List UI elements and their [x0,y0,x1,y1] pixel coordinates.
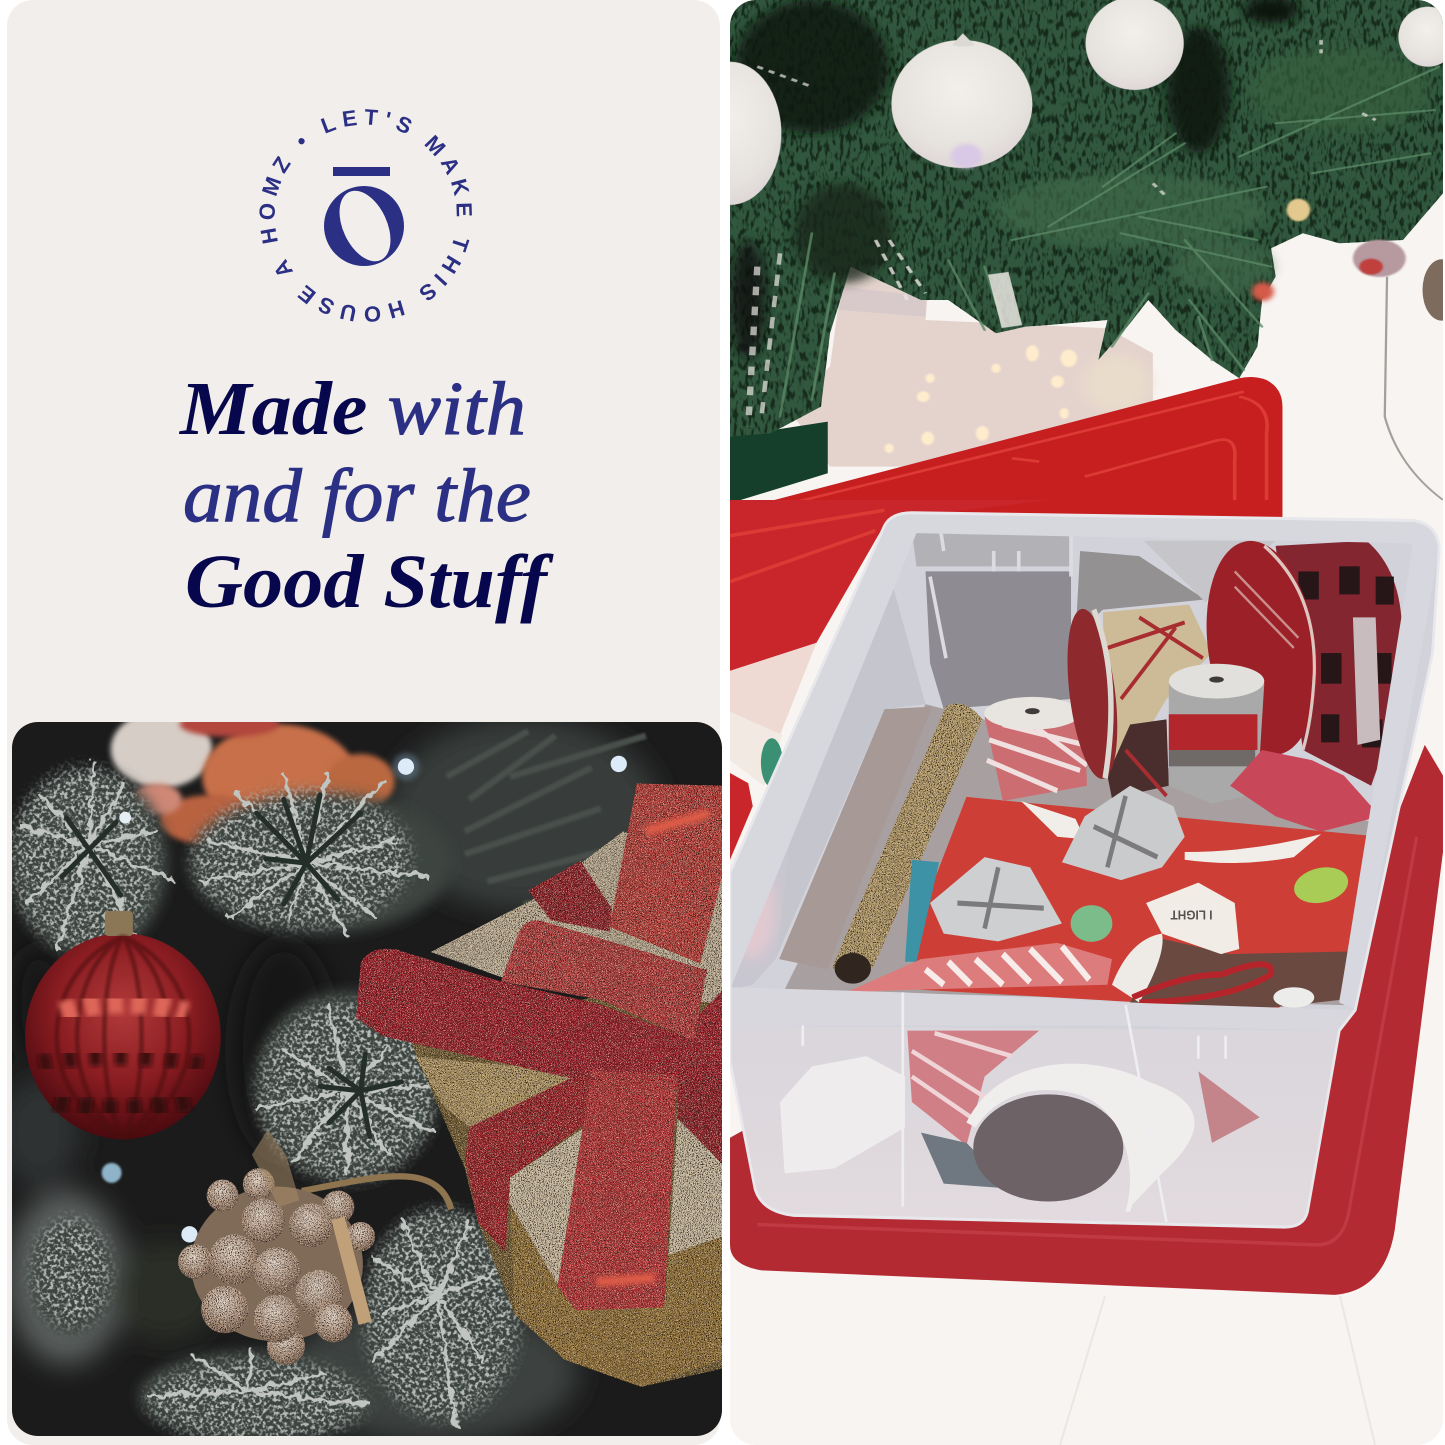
box seams [803,992,1226,1222]
gift wrap rolls [779,703,982,984]
logo mark [324,167,404,269]
needles [21,763,506,1428]
red wrapping paper [910,797,1380,1010]
pine tree [730,0,1443,437]
back wall [926,571,1071,709]
headline line 1: Made with [178,366,526,451]
headline line 2: and for the [183,453,531,538]
clear storage box: I LIGHT [1170,908,1213,922]
knit piece and fluff [1112,934,1348,1008]
white speckles through the tree [748,40,1376,427]
room and tree area [679,0,1445,520]
lights [102,753,627,1243]
ribbon spools [984,531,1402,804]
storage box contents [730,500,1443,1295]
bauble highlights [62,1002,186,1013]
headline line 3: Good Stuff [185,539,554,624]
interior floor [785,704,1389,1005]
plaid spool [1103,605,1212,778]
gold gift box [410,831,722,1387]
striped paper [846,943,1112,992]
teal paper roll [905,860,939,962]
white baubles [679,0,1445,205]
red lid behind box [730,377,1282,520]
photo: storage box under tree [679,0,1445,1445]
tree background [0,717,660,1442]
silver bows [930,786,1321,941]
circular slogan: LET'S MAKE THIS HOUSE A HOMZ • [259,109,472,322]
dark branches top right [447,731,646,904]
lid left of box [730,500,1280,860]
box rim [730,987,1357,1031]
ribbon highlight [596,813,709,1282]
tree stand with lights [730,267,1153,503]
branch shadows [10,770,521,1442]
floor [1060,1296,1375,1445]
frost [12,768,519,1442]
red lid under box [730,745,1443,1295]
red bauble [25,911,221,1139]
snowy branches [10,763,521,1442]
gift tag [1146,883,1239,954]
lime and mint shapes [1292,863,1351,908]
photo: Christmas tree ornaments and gift [0,711,722,1442]
headline [178,366,554,624]
left wall [776,590,926,958]
panel: brand message [7,0,720,1445]
wall ornaments and wire [1252,199,1445,500]
plush toy [111,711,395,845]
buffalo plaid spool [1276,541,1402,786]
bauble ribs [57,936,189,1139]
red ribbon bow [356,783,722,1310]
box front wall [730,1026,1339,1227]
pink bow [1230,750,1380,832]
silver spool [1169,684,1264,804]
logo badge [259,109,472,322]
twine spool [985,714,1087,801]
clear storage box [730,513,1439,1227]
frond strokes [780,67,1439,417]
front wall contents [780,1031,1260,1212]
gold berry cluster [178,1130,451,1365]
